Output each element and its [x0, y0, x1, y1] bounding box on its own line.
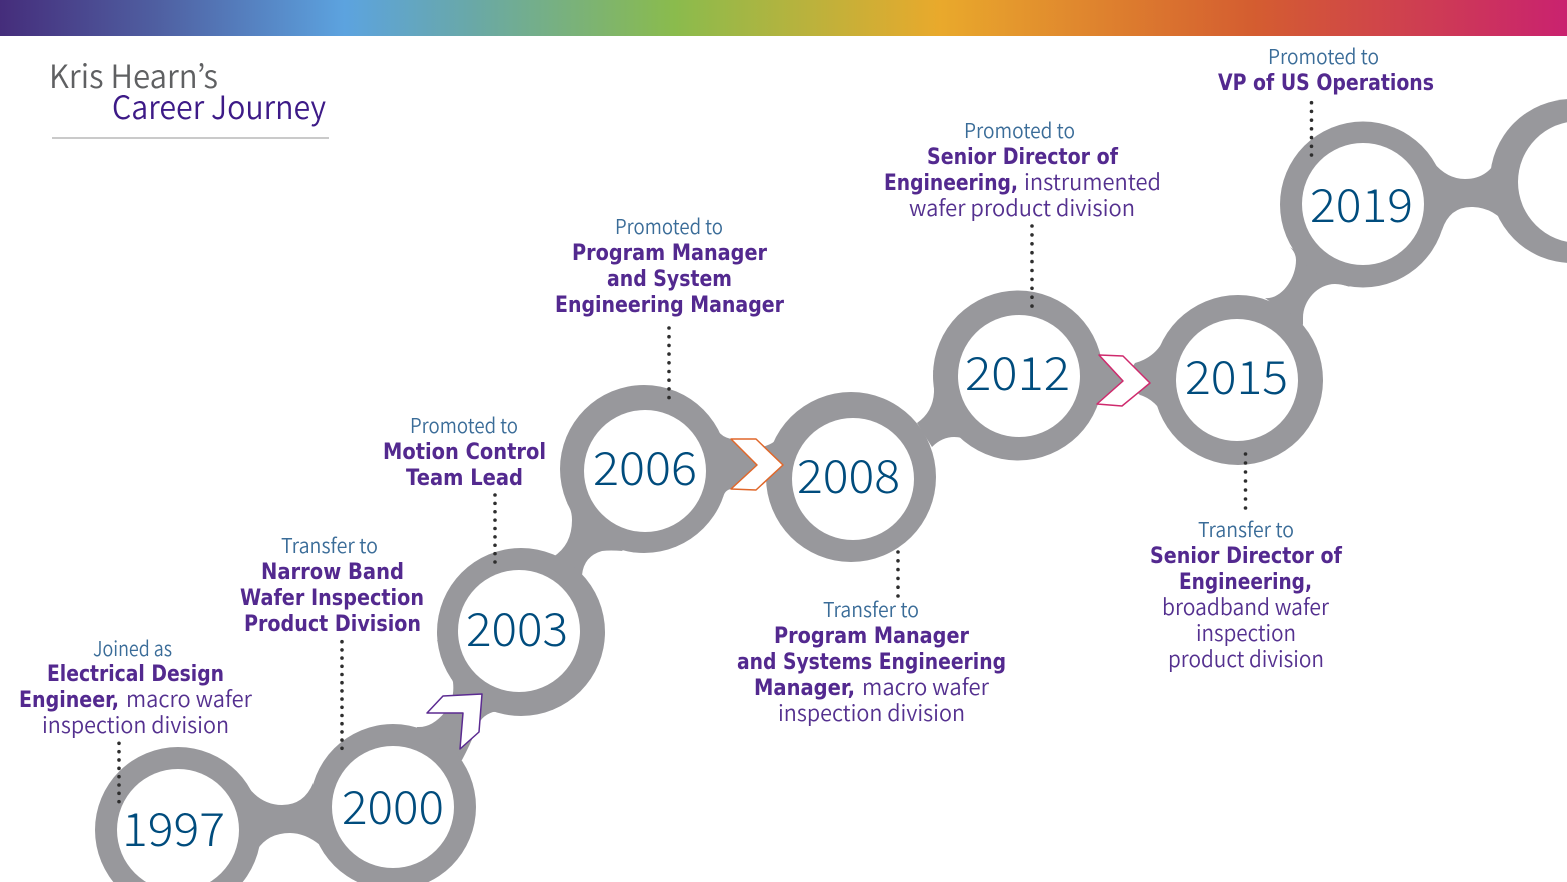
text: 2019: [1218, 40, 1434, 96]
text: 2000: Narrow Band: [261, 559, 404, 585]
arrow: purple: [427, 694, 482, 749]
text: 2008: macro wafer: [862, 670, 989, 702]
text: 2000: Product Division: [244, 611, 421, 637]
text: 2015: broadband wafer: [1162, 590, 1329, 622]
text: 2012: wafer product division: [909, 191, 1135, 223]
text: 2003: Promoted to: [410, 409, 518, 439]
text: 2003: [383, 409, 546, 491]
node: 2015: [1153, 295, 1323, 465]
header colour bar: [0, 0, 1567, 36]
node: next, cropped at right edge: [1490, 99, 1567, 263]
leader lines: [119, 103, 1312, 803]
node: 2008: 2008: [797, 441, 900, 507]
text: 2008: and Systems Engineering: [737, 649, 1006, 675]
node: 2000: 2000: [342, 772, 444, 838]
text: 2006: Program Manager: [572, 240, 768, 266]
text: 2012: Senior Director of: [927, 144, 1118, 170]
text: 2015: Engineering,: [1179, 569, 1312, 595]
text: 1997: macro wafer: [126, 682, 252, 714]
text: 1997: inspection division: [42, 708, 229, 740]
text: 2015: Senior Director of: [1150, 543, 1342, 569]
node: 2012: 2012: [965, 338, 1070, 404]
text: 2012: Engineering,: [884, 170, 1018, 196]
title: [49, 52, 329, 138]
text: 1997: [19, 632, 252, 740]
text: 2006: [555, 210, 785, 318]
node: 1997: [95, 747, 261, 882]
text: 2008: Program Manager: [774, 623, 970, 649]
text: 2012: [884, 114, 1161, 223]
text: 2006: Engineering Manager: [555, 292, 785, 318]
timeline connectors: [248, 153, 1508, 850]
node: 2019: 2019: [1310, 170, 1413, 236]
text: 2008: Manager,: [754, 675, 855, 701]
text: 2015: Transfer to: [1198, 513, 1294, 543]
text: 2000: Wafer Inspection: [240, 585, 424, 611]
text: 2008: [737, 593, 1006, 728]
text: 2008: Transfer to: [823, 593, 919, 623]
text: 1997: Engineer,: [19, 687, 119, 713]
text: 2006: Promoted to: [615, 210, 723, 240]
node: 2003: [437, 548, 605, 716]
arrow: magenta: [1097, 355, 1150, 406]
node: 2003: 2003: [466, 594, 568, 660]
text: 1997: Joined as: [93, 632, 172, 662]
text: 2015: inspection: [1196, 616, 1296, 648]
text: 2000: [240, 529, 424, 637]
text: 1997: Electrical Design: [47, 661, 224, 687]
node: 2008: [766, 392, 936, 562]
node: 1997: 1997: [122, 794, 225, 860]
text: 2019: VP of US Operations: [1218, 70, 1434, 96]
text: 2008: inspection division: [778, 696, 965, 728]
text: 2006: and System: [607, 266, 732, 292]
node: 2006: 2006: [593, 433, 697, 499]
text: 2019: Promoted to: [1268, 40, 1379, 70]
node: 2000: [310, 724, 476, 882]
arrow: orange: [731, 439, 783, 490]
node: 2015: 2015: [1185, 342, 1288, 408]
text: 2003: Team Lead: [406, 465, 523, 491]
text: 2015: [1150, 513, 1342, 674]
node: 2012: [933, 290, 1103, 460]
node: 2019: [1280, 122, 1446, 288]
text: 2012: instrumented: [1024, 165, 1161, 197]
text: 2012: Promoted to: [964, 114, 1075, 144]
title: Kris Hearn’s: [49, 52, 218, 98]
text: 2015: product division: [1168, 642, 1324, 674]
node: 2006: [560, 385, 728, 553]
text: 2000: Transfer to: [281, 529, 378, 559]
title: Career Journey: [112, 83, 326, 129]
text: 2003: Motion Control: [383, 439, 546, 465]
